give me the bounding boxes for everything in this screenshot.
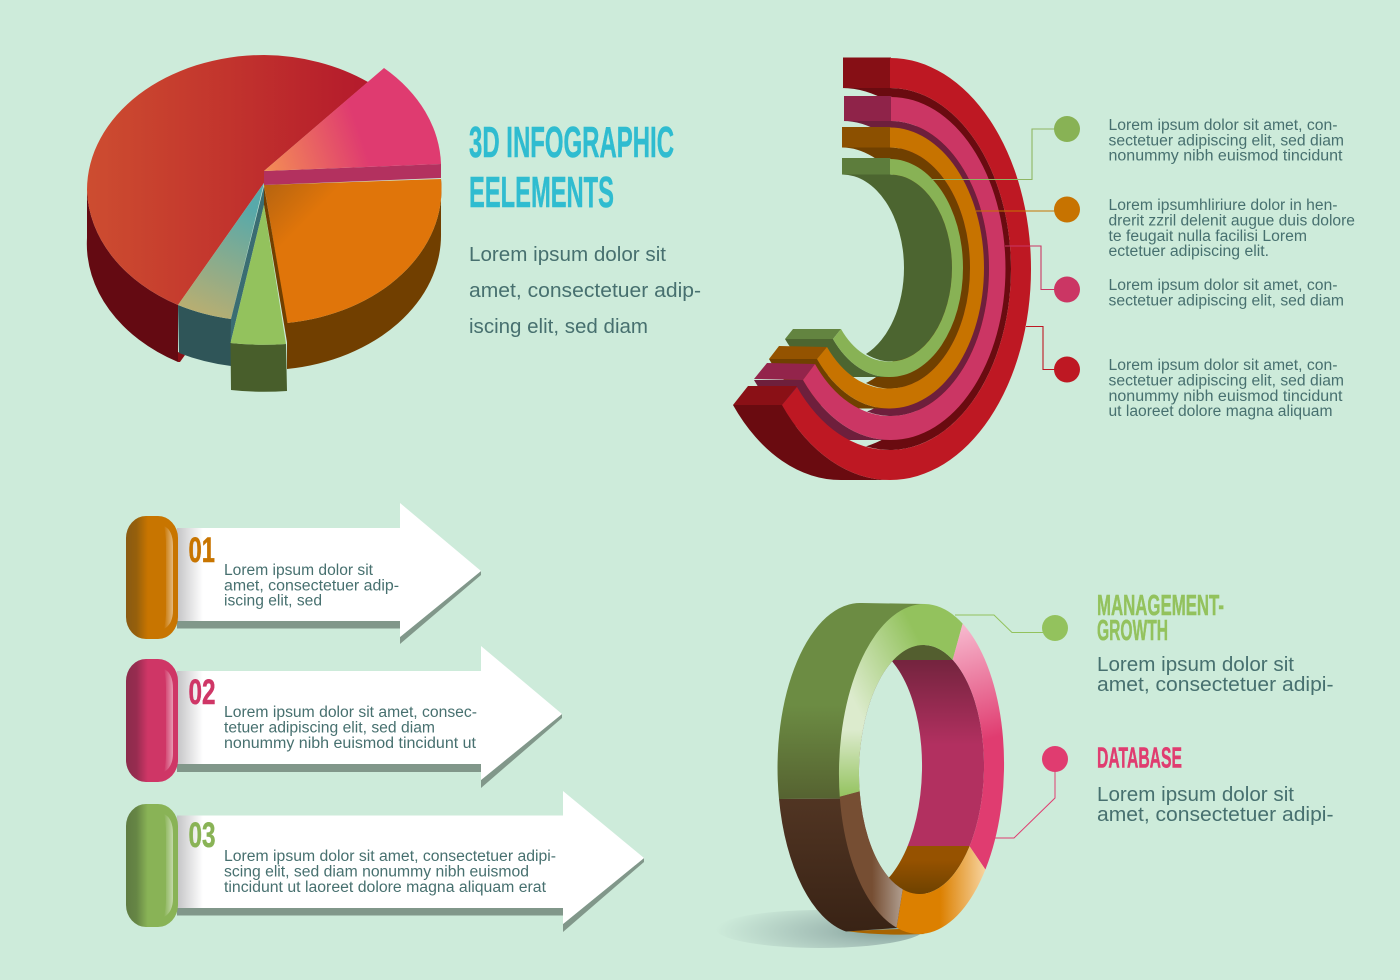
text 01: amet, consectetuer adip- xyxy=(224,578,399,594)
ring segment: orange xyxy=(896,846,986,934)
pill 03 xyxy=(126,804,178,927)
pie slice: pink xyxy=(264,68,441,171)
callout text: pink: sectetuer adipiscing elit, sed diam xyxy=(1108,292,1344,310)
ring segment: green xyxy=(838,604,962,797)
text: database xyxy=(1097,784,1334,826)
text 01: Lorem ipsum dolor sit xyxy=(224,562,374,579)
callout dot: red xyxy=(1054,356,1080,382)
pie slice: red xyxy=(87,55,368,305)
ring outer side: brown xyxy=(779,798,925,932)
callout text: red: nonummy nibh euismod tincidunt xyxy=(1108,388,1343,405)
pie inner wall: orange xyxy=(264,186,288,345)
pie side: red xyxy=(87,190,178,362)
pie slice: orange xyxy=(264,179,441,323)
pie slice: teal xyxy=(178,183,264,319)
text 02: nonummy nibh euismod tincidunt ut xyxy=(224,735,477,752)
ring segment: pink xyxy=(952,624,1004,870)
text: management growth xyxy=(1097,654,1334,696)
callout text: orange: ectetuer adipiscing elit. xyxy=(1108,243,1269,260)
callout text: orange: Lorem ipsumhliriure dolor in hen- xyxy=(1108,197,1338,214)
callout text: red: sectetuer adipiscing elit, sed diam xyxy=(1108,372,1344,390)
callout text: red xyxy=(1108,357,1344,420)
pie side: orange xyxy=(287,179,441,369)
ground shadow xyxy=(716,910,924,948)
number 03: 03 xyxy=(188,816,216,855)
title: 3D INFOGRAPHIC xyxy=(469,118,674,167)
3D ring chart xyxy=(778,603,1004,935)
text 01: iscing elit, sed xyxy=(224,592,322,610)
callout text: pink: Lorem ipsum dolor sit amet, con- xyxy=(1108,277,1338,294)
text 03: Lorem ipsum dolor sit amet, consectetuer adipi- xyxy=(224,848,556,865)
callout line: management growth xyxy=(955,615,1045,632)
callout line: database xyxy=(995,770,1055,838)
arrow 01 xyxy=(126,503,481,644)
intro text: Lorem ipsum dolor sit xyxy=(469,244,666,266)
inner wall: pink xyxy=(843,121,989,416)
number 01: 01 xyxy=(188,531,215,570)
callout text: green xyxy=(1108,117,1344,164)
pill 02 xyxy=(126,659,178,782)
text: management growth: Lorem ipsum dolor sit xyxy=(1097,654,1294,676)
3D concentric arcs chart xyxy=(733,58,1031,480)
ring: red xyxy=(733,58,1031,480)
ring: pink xyxy=(754,96,1006,440)
pie side: teal xyxy=(178,305,231,366)
pie inner wall: pink xyxy=(264,164,441,185)
text: management growth: amet, consectetuer adipi- xyxy=(1097,674,1334,696)
callout dot: database xyxy=(1042,746,1068,772)
text 02: tetuer adipiscing elit, sed diam xyxy=(224,720,435,736)
ring inner wall xyxy=(859,645,984,894)
ring: green xyxy=(785,158,963,377)
inner wall: green xyxy=(842,174,952,361)
pie inner wall: teal xyxy=(230,186,264,343)
text 02: Lorem ipsum dolor sit amet, consec- xyxy=(224,704,477,721)
ring: orange xyxy=(769,127,984,409)
callout text: green: sectetuer adipiscing elit, sed diam xyxy=(1108,132,1344,150)
arrow 03 xyxy=(126,791,644,932)
heading: database: DATABASE xyxy=(1097,742,1182,774)
callout text: red: Lorem ipsum dolor sit amet, con- xyxy=(1108,357,1338,374)
heading: management growth: GROWTH xyxy=(1097,615,1168,647)
intro text: iscing elit, sed diam xyxy=(469,316,648,338)
callout dot: orange xyxy=(1054,196,1080,222)
text: database: Lorem ipsum dolor sit xyxy=(1097,784,1294,806)
callout lines: arcs chart xyxy=(932,129,1057,370)
callout text: orange: drerit zzril delenit augue duis dolore xyxy=(1108,212,1355,230)
pie slice: green xyxy=(230,205,286,345)
title xyxy=(469,118,674,217)
callout text: green: Lorem ipsum dolor sit amet, con- xyxy=(1108,117,1338,134)
text 01 xyxy=(224,562,399,610)
callout text: green: nonummy nibh euismod tincidunt xyxy=(1108,148,1343,164)
pill 01 xyxy=(126,516,178,639)
callout dot: pink xyxy=(1054,276,1080,302)
intro text xyxy=(469,244,701,338)
inner wall: orange xyxy=(842,148,970,389)
callout text: orange xyxy=(1108,197,1355,260)
pie side: red tip xyxy=(178,352,185,362)
callout dot: green xyxy=(1054,116,1080,142)
3D pie chart xyxy=(87,55,441,392)
arrow 02 xyxy=(126,646,562,788)
text 02 xyxy=(224,704,477,752)
text 03: tincidunt ut laoreet dolore magna aliquam erat xyxy=(224,879,547,896)
ring outer side: orange base xyxy=(846,929,925,935)
number 02: 02 xyxy=(188,673,216,712)
inner wall: red xyxy=(842,88,1011,450)
text 03 xyxy=(224,848,556,896)
heading: management growth xyxy=(1097,590,1224,647)
ring front face xyxy=(838,604,1004,934)
callout text: orange: te feugait nulla facilisi Lorem xyxy=(1108,228,1307,245)
text: database: amet, consectetuer adipi- xyxy=(1097,804,1334,826)
callout text: pink xyxy=(1108,277,1344,310)
callout text: red: ut laoreet dolore magna aliquam xyxy=(1108,403,1332,420)
ring segment: brown xyxy=(840,791,903,928)
intro text: amet, consectetuer adip- xyxy=(469,280,701,302)
heading: management growth: MANAGEMENT- xyxy=(1097,590,1224,622)
text 03: scing elit, sed diam nonummy nibh euismod xyxy=(224,864,529,880)
callout dot: management growth xyxy=(1042,615,1068,641)
ring outer side: green xyxy=(778,603,925,799)
title: EELEMENTS xyxy=(469,168,614,217)
pie side: green xyxy=(230,343,287,392)
